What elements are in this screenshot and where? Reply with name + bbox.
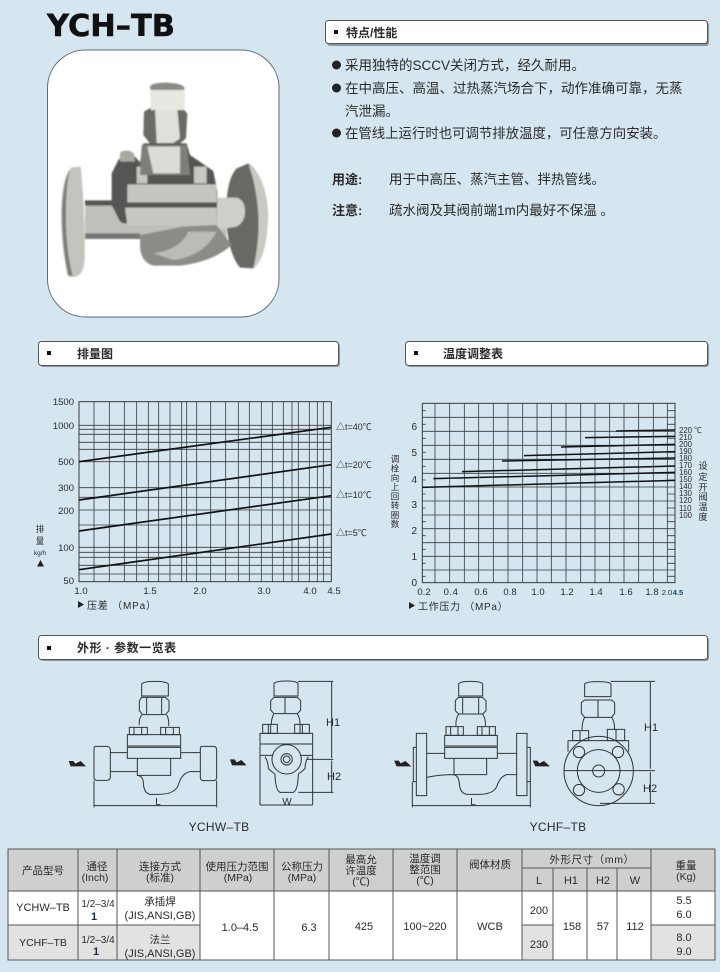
table body: 1/2–3/4 (81, 935, 115, 946)
table header: 公称压力 (281, 860, 323, 873)
text block: features list: 汽泄漏。 (345, 104, 399, 119)
chart: temperature adjustment: 170 (679, 461, 693, 470)
heading: features: 特点/性能 (346, 25, 397, 40)
chart: temperature adjustment: 上 (391, 482, 400, 492)
table body: 1.0–4.5 (222, 922, 258, 934)
table body: 5.5 (676, 895, 692, 907)
chart: flow rate: 500 (58, 457, 74, 468)
table body: 6.0 (676, 909, 692, 921)
table header: (℃) (416, 875, 434, 887)
chart: temperature adjustment: 4 (411, 475, 417, 486)
chart: flow rate: 4.0 (303, 586, 317, 597)
diagram: YCHF-TB: L (470, 797, 476, 808)
chart: temperature adjustment: 130 (679, 489, 693, 498)
diagram: YCHW-TB: L (155, 797, 161, 808)
table body: 425 (355, 921, 373, 933)
flow curve 10 (79, 496, 331, 531)
chart: flow rate: 50 (63, 576, 74, 587)
flow curve 5 (79, 534, 331, 570)
chart: temperature adjustment: 回 (391, 492, 399, 502)
chart: temperature adjustment: 0.8 (503, 587, 517, 598)
table body: (JIS,ANSI,GB) (125, 948, 195, 960)
table body: 1 (93, 946, 99, 958)
chart: temperature adjustment: 1.2 (560, 587, 574, 598)
chart: temperature adjustment (391, 403, 708, 613)
table header: H2 (596, 875, 610, 887)
flow curve 20 (79, 465, 331, 500)
chart: temperature adjustment: 0 (411, 578, 417, 589)
chart: temperature adjustment: 2.0 (662, 588, 672, 597)
chart: temperature adjustment: 180 (679, 454, 693, 463)
chart: flow rate: 量 (36, 536, 45, 546)
chart: temperature adjustment: 1.6 (619, 587, 633, 598)
text block: notice: 注意: (332, 203, 362, 218)
chart: temperature adjustment: 阀 (698, 492, 708, 502)
table header: 通径 (86, 860, 108, 873)
table header: 重量 (676, 859, 697, 872)
chart: flow rate: kg/h (34, 550, 47, 557)
heading: dimensions and parameters (38, 636, 709, 661)
table body: 9.0 (676, 946, 692, 958)
table body: 法兰 (150, 933, 170, 946)
chart: flow rate: 压差 （MPa） (87, 599, 157, 612)
chart: temperature adjustment: 110 (679, 504, 692, 513)
chart: temperature adjustment: 1.0 (531, 587, 545, 598)
table header: (MPa) (288, 872, 316, 884)
chart: temperature adjustment: 向 (391, 473, 399, 483)
panel: product photo (48, 50, 279, 317)
table body (16, 895, 692, 960)
text block: features list (332, 58, 682, 141)
chart: flow rate: △t=20℃ (336, 460, 372, 470)
table header: H1 (564, 875, 578, 887)
chart: flow rate: △t=40℃ (336, 422, 372, 432)
chart: temperature adjustment: 0.6 (474, 587, 488, 598)
side view (564, 681, 655, 806)
icon: flow arrow side (230, 759, 247, 765)
chart: temperature adjustment: 6 (411, 422, 417, 433)
chart: flow rate: 1.5 (143, 586, 157, 597)
chart: temperature adjustment: 0.2 (417, 587, 431, 598)
text block: notice: 疏水阀及其阀前端1m内最好不保温 。 (389, 202, 614, 218)
chart: temperature adjustment: 1.8 (645, 587, 659, 598)
table header: 使用压力范围 (206, 860, 268, 873)
table body: 1 (91, 911, 97, 923)
table body: 57 (597, 921, 609, 933)
chart: temperature adjustment: 220 ℃ (679, 426, 702, 435)
chart: temperature adjustment: 2 (411, 526, 417, 537)
table header: (℃) (352, 876, 370, 888)
diagram: YCHW-TB: YCHW–TB (189, 820, 249, 834)
chart: temperature adjustment: 开 (698, 482, 708, 492)
table header: 产品型号 (22, 864, 64, 877)
title: YCH–TB (46, 9, 175, 44)
chart: temperature adjustment: 200 (679, 440, 693, 449)
chart: temperature adjustment: 160 (679, 468, 693, 477)
chart: flow rate: △t=5℃ (336, 528, 367, 538)
chart: temperature adjustment: 圈 (391, 510, 399, 520)
heading: features (326, 20, 709, 46)
chart: temperature adjustment: 100 (679, 511, 693, 520)
table header: 许温度 (345, 864, 377, 877)
chart: temperature adjustment: 1 (411, 552, 417, 563)
table header: (Inch) (82, 872, 108, 884)
front view (412, 681, 530, 807)
diagram: YCHW-TB: H1 (326, 717, 340, 729)
chart: flow rate: 2.0 (193, 586, 207, 597)
table body: 6.3 (301, 922, 317, 934)
flow curve 40 (79, 427, 331, 462)
chart: flow rate: 1000 (53, 421, 74, 432)
table body: 承插焊 (144, 895, 176, 908)
table header: 温度调 (409, 852, 441, 865)
table body: (JIS,ANSI,GB) (125, 910, 195, 922)
chart: temperature adjustment: 140 (679, 482, 693, 491)
heading: flow chart: 排量图 (77, 346, 113, 361)
table body: WCB (477, 921, 503, 933)
chart: flow rate (34, 397, 372, 612)
chart: temperature adjustment: 3 (411, 500, 417, 511)
icon: valve photograph (61, 83, 268, 277)
chart: temperature adjustment: 5 (411, 448, 417, 459)
icon: flow arrow outlet (533, 761, 550, 766)
chart: temperature adjustment: 定 (698, 471, 708, 482)
table header: (MPa) (224, 872, 252, 884)
chart: temperature adjustment: 转 (391, 500, 400, 510)
front view (94, 681, 217, 807)
chart: temperature adjustment: 150 (679, 475, 693, 484)
diagram: YCHW-TB: W (282, 797, 292, 808)
chart: temperature adjustment: 数 (391, 519, 400, 529)
table body: 1/2–3/4 (81, 899, 115, 910)
chart: temperature adjustment: 0.4 (444, 587, 458, 598)
text block: features list: 在中高压、高温、过热蒸汽场合下，动作准确可靠，无蒸 (345, 80, 682, 96)
chart: flow rate: 4.5 (327, 586, 341, 597)
chart: temperature adjustment: 设 (698, 461, 708, 471)
chart: flow rate: 3.0 (257, 586, 271, 597)
chart: temperature adjustment: 度 (698, 511, 708, 522)
diagram: YCHF-TB: YCHF–TB (530, 820, 586, 834)
icon: flow arrow inlet (394, 761, 411, 766)
table body: 112 (626, 921, 644, 933)
table body: 200 (530, 905, 548, 917)
table header: (标准) (146, 872, 174, 884)
diagram: YCHF-TB: H1 (644, 722, 658, 734)
table body: 158 (563, 921, 581, 933)
chart: temperature adjustment: 4.5 (673, 588, 683, 597)
chart: temperature adjustment: 190 (679, 447, 693, 456)
table header: (Kg) (676, 871, 696, 883)
icon: flow arrow (69, 761, 86, 766)
table header: L (536, 875, 542, 887)
diagram: YCHW-TB (69, 681, 341, 834)
chart: temperature adjustment: 120 (679, 496, 693, 505)
table body: YCHF–TB (19, 937, 67, 949)
table header (22, 852, 697, 888)
chart: flow rate: 1.0 (74, 586, 88, 597)
table header: 外形尺寸（mm） (549, 853, 635, 866)
chart: flow rate: △t=10℃ (336, 490, 372, 500)
table header: 连接方式 (139, 860, 181, 873)
side view (260, 681, 333, 805)
diagram: YCHF-TB (394, 681, 658, 834)
chart: temperature adjustment: 调 (391, 454, 399, 464)
text block: features list: 在管线上运行时也可调节排放温度，可任意方向安装。 (345, 125, 666, 141)
diagram: YCHW-TB: H2 (327, 771, 341, 783)
table body: YCHW–TB (16, 902, 70, 914)
chart: temperature adjustment: 栓 (391, 464, 400, 474)
table header: W (630, 875, 641, 887)
heading: temperature table: 温度调整表 (443, 346, 503, 361)
text block: usage: 用于中高压、蒸汽主管、拌热管线。 (389, 171, 605, 187)
table header: 阀体材质 (469, 858, 511, 871)
chart: temperature adjustment: 1.4 (589, 587, 603, 598)
table header: 最高允 (345, 853, 377, 866)
heading: dimensions and parameters: 外形 · 参数一览表 (77, 640, 177, 655)
heading: temperature table (406, 342, 709, 367)
heading: flow chart (38, 342, 340, 367)
temperature curves (422, 430, 675, 487)
table: parameters (8, 849, 715, 960)
chart: flow rate: 200 (58, 506, 74, 517)
text block: usage: 用途: (332, 172, 362, 187)
chart: temperature adjustment: 工作压力 （MPa） (418, 600, 508, 613)
chart: temperature adjustment: 温 (698, 502, 708, 512)
chart: flow rate: 1500 (53, 397, 74, 408)
diagram: YCHF-TB: H2 (643, 783, 657, 795)
chart: flow rate: 100 (58, 543, 74, 554)
text block: features list: 采用独特的SCCV关闭方式，经久耐用。 (345, 58, 585, 73)
table body: 8.0 (676, 932, 692, 944)
chart: flow rate: 排 (36, 524, 45, 534)
chart: flow rate: 300 (58, 483, 74, 494)
chart: temperature adjustment: 210 (679, 433, 693, 442)
table body: 100~220 (403, 921, 447, 933)
table body: 230 (530, 939, 548, 951)
table header: 整范围 (409, 863, 441, 876)
